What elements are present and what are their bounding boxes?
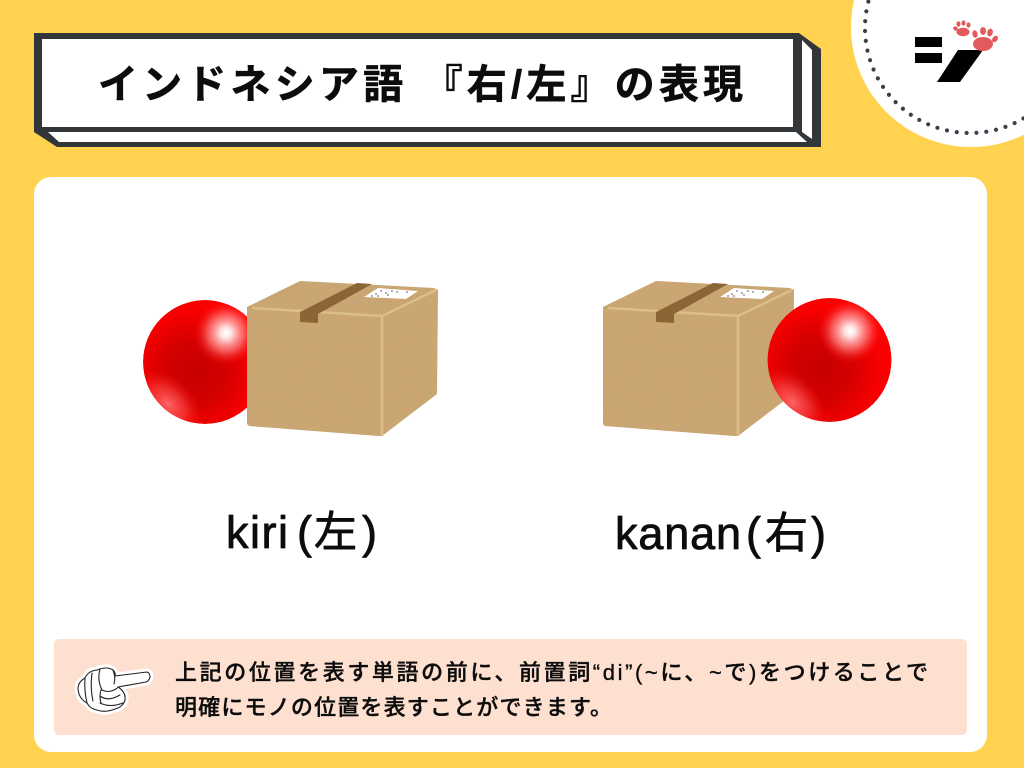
title banner (34, 33, 821, 147)
label: kanan: 右 (765, 510, 808, 558)
label: kanan: kanan (615, 508, 741, 559)
callout background (54, 639, 967, 735)
illustration: ball right of box (603, 281, 892, 449)
icon: cardboard box (247, 281, 438, 436)
label: kiri: kiri (226, 507, 288, 558)
icon: red ball (143, 300, 247, 424)
banner face (42, 39, 793, 127)
icon: cardboard box (603, 281, 794, 436)
logo badge (851, 0, 1024, 147)
badge white circle (851, 0, 1024, 147)
label: kanan: ( (746, 508, 761, 559)
callout line 2: 明確にモノの位置を表すことができます。 (175, 695, 612, 720)
label: kanan: ) (811, 508, 826, 559)
banner bottom highlight (48, 132, 807, 142)
label: kiri: 左 (314, 509, 357, 557)
panel background (34, 177, 987, 752)
banner 3D frame (34, 33, 821, 147)
icon: pointing hand (78, 668, 150, 711)
callout text (175, 660, 928, 720)
icon: red ball (768, 298, 892, 422)
label: kiri: ( (297, 507, 312, 558)
callout line 1: 上記の位置を表す単語の前に、前置詞“di”(~に、~で)をつけることで (175, 660, 928, 685)
callout (54, 639, 967, 735)
banner right highlight (802, 40, 812, 139)
logo mark (915, 37, 983, 82)
title: インドネシア語 『右/左』の表現 (98, 63, 743, 107)
illustration: ball left of box (143, 281, 438, 436)
icon: paw prints (952, 20, 999, 51)
main white panel (34, 177, 987, 752)
dotted ring (865, 0, 1024, 133)
label: kiri: ) (362, 507, 377, 558)
